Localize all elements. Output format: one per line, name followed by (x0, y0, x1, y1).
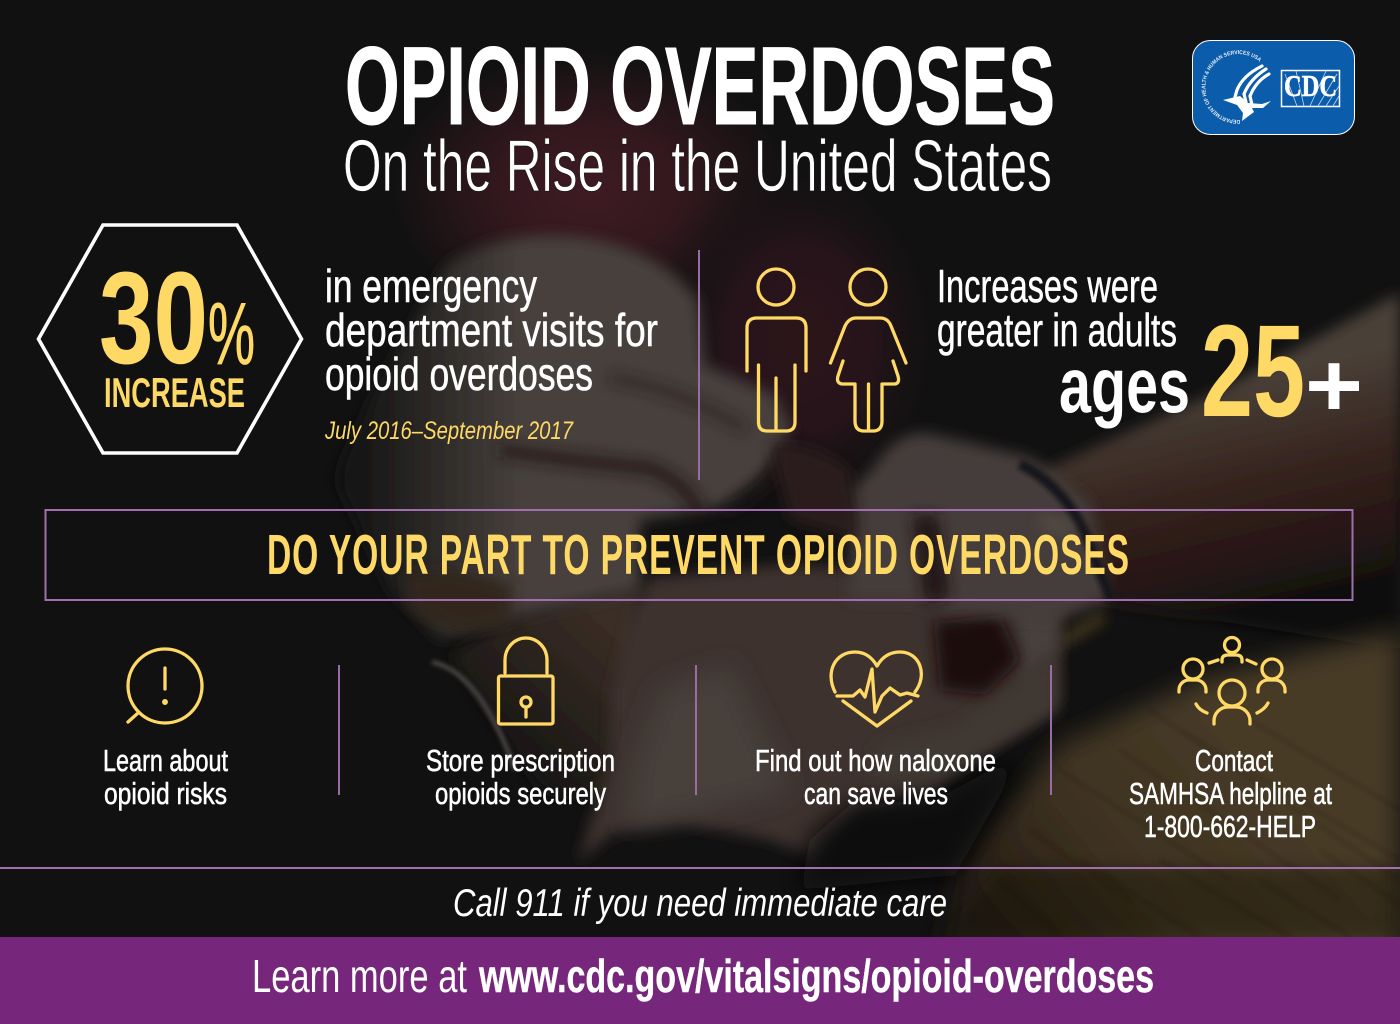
action: store prescription opioids: opioids securely (435, 776, 606, 811)
action: SAMHSA helpline: 1-800-662-HELP (1144, 809, 1316, 844)
text: increases greater in adults ages 25+: greater in adults (937, 304, 1177, 356)
background: blurred photo of clasped hands on wood (369, 68, 1400, 937)
text: increases greater in adults ages 25+ (937, 260, 1363, 444)
action: store prescription opioids (426, 638, 615, 811)
text: emergency department visits: July 2016–September 2017 (324, 417, 574, 445)
action: learn about opioid risks: Learn about (103, 743, 228, 778)
stat: 30% increase hexagon: INCREASE (104, 369, 245, 416)
upper hand and fingers (335, 236, 792, 640)
action: naloxone: Find out how naloxone (755, 743, 996, 778)
text: increases greater in adults ages 25+: 25 (1201, 297, 1305, 444)
title (343, 25, 1055, 207)
cuff (432, 662, 515, 770)
icon: alert speech bubble (128, 649, 202, 723)
text: emergency department visits: opioid overdoses (325, 348, 593, 400)
icon: man and woman (747, 269, 906, 431)
icon: group of people (1179, 638, 1285, 724)
lower hands (450, 585, 640, 800)
footer bar (0, 937, 1400, 1024)
action: learn about opioid risks (103, 649, 228, 811)
stat: 30% increase hexagon: 30 (99, 244, 208, 391)
icon: padlock (498, 638, 553, 724)
text: emergency department visits (324, 260, 658, 445)
icon: CDC mark: CDC (1284, 68, 1337, 103)
banner: do your part (46, 510, 1352, 600)
text: increases greater in adults ages 25+: + (1305, 336, 1363, 436)
icon: heart with pulse (831, 652, 921, 726)
action: naloxone: can save lives (804, 776, 948, 811)
stat: 30% increase hexagon: % (208, 284, 255, 383)
text: increases greater in adults ages 25+: ages (1059, 341, 1190, 429)
CDC / HHS logo (1192, 40, 1355, 135)
text: call 911: Call 911 if you need immediate care (453, 882, 947, 925)
action: SAMHSA helpline: Contact (1195, 743, 1273, 778)
text: emergency department visits: department visits for (325, 304, 658, 356)
footer bar: Learn more at (252, 950, 467, 1002)
action: SAMHSA helpline: SAMHSA helpline at (1129, 776, 1332, 811)
footer bar: www.cdc.gov/vitalsigns/opioid-overdoses (478, 950, 1154, 1002)
action: learn about opioid risks: opioid risks (104, 776, 227, 811)
action: naloxone (755, 652, 996, 811)
stat: 30% increase hexagon (38, 225, 302, 453)
right knuckles and bracelet (850, 433, 1110, 620)
icon: HHS eagle seal: DEPARTMENT OF HEALTH & HUMAN SERVICES USA (1202, 50, 1261, 124)
text: emergency department visits: in emergency (325, 260, 537, 312)
action: SAMHSA helpline (1129, 638, 1332, 844)
title: On the Rise in the United States (343, 126, 1052, 207)
text: increases greater in adults ages 25+: Increases were (937, 260, 1158, 312)
action: store prescription opioids: Store prescription (426, 743, 615, 778)
